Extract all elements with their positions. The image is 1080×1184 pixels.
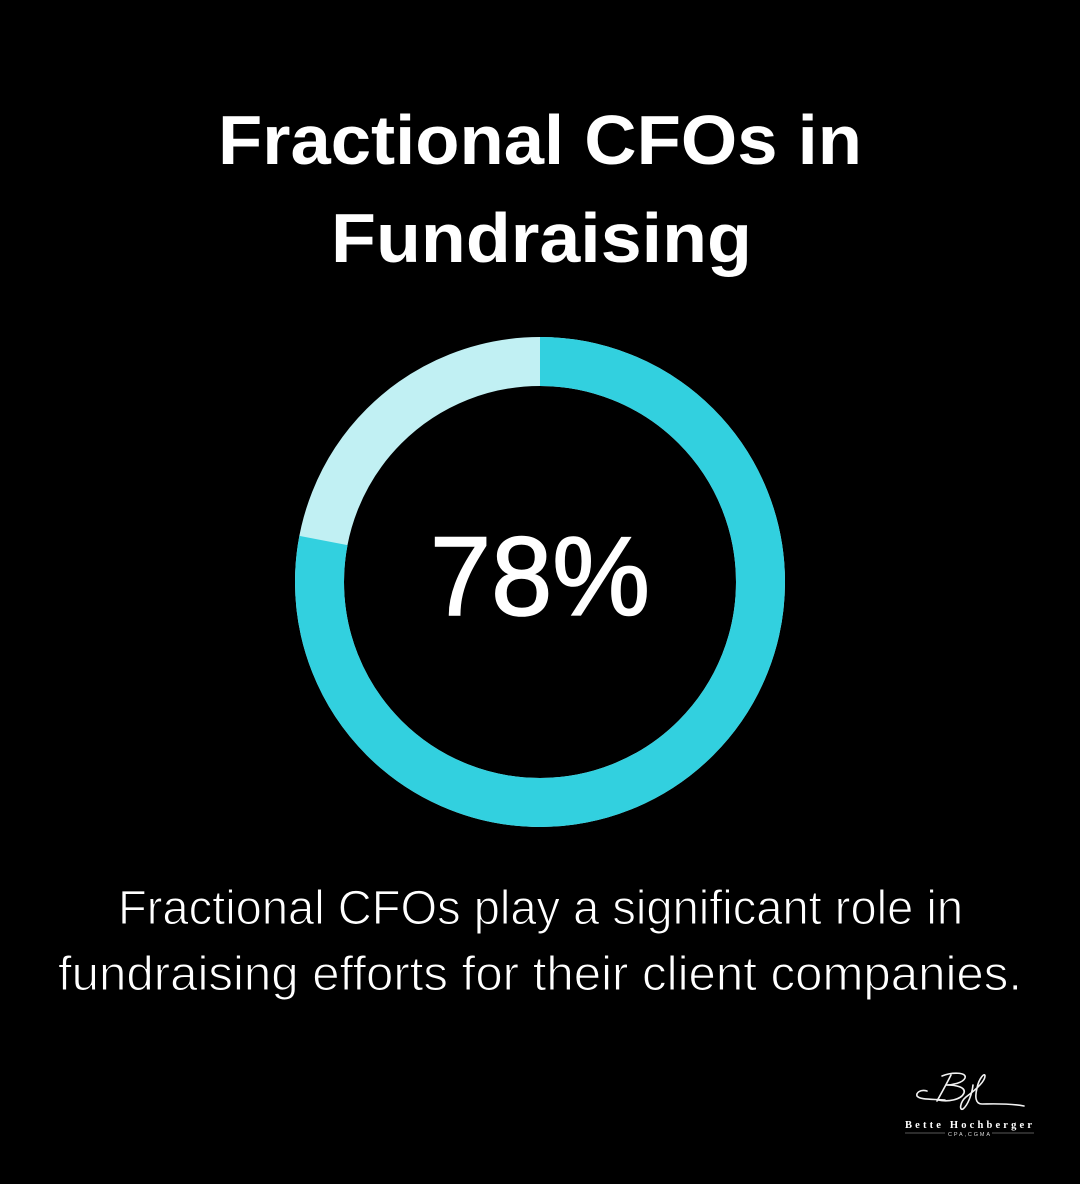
- title: Fractional CFOs in: [218, 101, 862, 179]
- title: Fundraising: [331, 199, 752, 277]
- logo credentials: CPA,CGMA: [948, 1132, 990, 1138]
- donut chart: 78 percent: [320, 362, 760, 802]
- 78 percent arc: [320, 362, 760, 802]
- logo rules: [905, 1132, 1034, 1134]
- description text: fundraising efforts for their client companies.: [58, 948, 1022, 1001]
- title: [218, 101, 862, 277]
- center percentage: 78%: [430, 514, 650, 639]
- remaining 22 percent arc: [320, 362, 760, 802]
- logo name: Bette Hochberger: [905, 1120, 1032, 1131]
- description text: [58, 882, 1022, 1001]
- logo: Bette Hochberger: [905, 1073, 1034, 1138]
- description text: Fractional CFOs play a significant role in: [118, 882, 963, 935]
- logo signature monogram: [917, 1073, 1024, 1109]
